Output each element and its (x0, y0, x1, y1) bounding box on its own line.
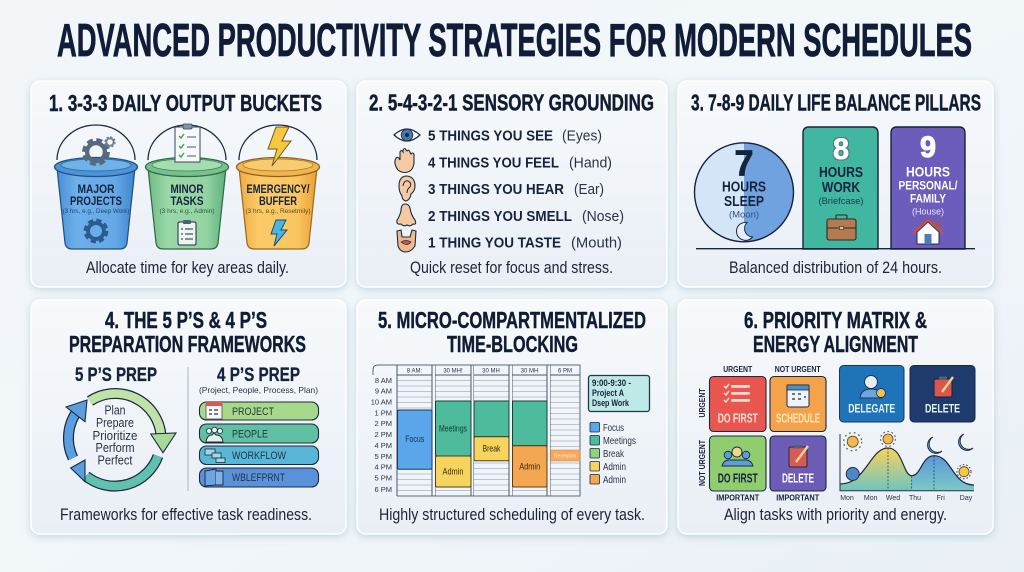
row: hear (399, 176, 604, 201)
chart: energy curve: Day (960, 495, 973, 502)
pillar: 7 hours sleep: SLEEP (724, 194, 764, 210)
panel: micro-compartmentalized time-blocking (357, 300, 667, 534)
legend (590, 422, 636, 486)
caption: panel 2: Quick reset for focus and stress. (410, 259, 613, 277)
pillar: 9 hours personal family: PERSONAL/ (898, 178, 958, 192)
row: taste (397, 230, 622, 252)
pillar: 9 hours personal family: HOURS (906, 164, 950, 180)
heading: panel 4 (69, 307, 306, 357)
cycle diagram: 5 P's (66, 393, 176, 486)
heading: panel 5: 5. MICRO-COMPARTMENTALIZED (378, 307, 646, 333)
block: focus (398, 410, 432, 469)
row: taste: 1 THING YOU TASTE (428, 236, 561, 252)
icon: bucket minor tasks: MINOR (170, 184, 204, 196)
pillar: 8 hours work: (Briefcase) (818, 196, 864, 207)
icon: bucket emergency buffer (236, 125, 320, 249)
block: admin orange (512, 446, 547, 487)
row: hear: 3 THINGS YOU HEAR (428, 182, 564, 198)
pillar: 8 hours work: HOURS (819, 165, 863, 181)
row: see (394, 128, 602, 144)
pillar: 7 hours sleep: 7 (734, 142, 754, 184)
row: feel: (Hand) (569, 156, 612, 172)
icon: bucket major projects: (3 hrs, e.g., Deep Work) (62, 208, 130, 215)
caption: panel 1: Allocate time for key areas daily. (86, 259, 289, 277)
row: see: 5 THINGS YOU SEE (428, 128, 553, 144)
pill: project: PROJECT (232, 406, 274, 418)
block: focus: Focus (405, 434, 424, 445)
card: delete navy (910, 366, 975, 422)
icon: bucket emergency buffer: BUFFER (259, 196, 298, 208)
calendar grid: 4 PM (374, 441, 392, 450)
legend: Meetings (603, 435, 636, 447)
icon: bucket major projects: MAJOR (78, 184, 115, 196)
card: delegate: DELEGATE (848, 402, 895, 416)
calendar grid: 5 PM (374, 452, 392, 461)
cell: do first green: DO FIRST (718, 472, 758, 486)
calendar grid: 4 PM (374, 462, 392, 472)
chart: energy curve: Thu (909, 495, 921, 502)
legend: Admin (603, 474, 626, 486)
callout: time block note: 9:00-9:30 - (592, 378, 631, 389)
heading: panel 4: PREPARATION FRAMEWORKS (69, 331, 306, 357)
heading: panel 6: 6. PRIORITY MATRIX & (744, 307, 927, 333)
icon: bucket minor tasks (146, 124, 228, 249)
matrix axis labels: NOT URGENT (775, 365, 821, 374)
icon: bucket minor tasks: TASKS (170, 196, 204, 208)
calendar grid: 8 AM: (407, 368, 423, 374)
row: see: (Eyes) (562, 128, 602, 144)
row: feel: 4 THINGS YOU FEEL (428, 156, 559, 172)
panel: priority matrix and energy alignment (678, 300, 993, 534)
heading: panel 5: TIME-BLOCKING (447, 331, 578, 357)
calendar grid: 6 PM (374, 485, 392, 494)
matrix axis labels: IMPORTANT (716, 494, 759, 502)
cell: do first green (710, 436, 766, 491)
legend: Admin (603, 461, 626, 473)
cycle diagram: 5 P's: Perform (96, 441, 134, 455)
caption: panel 5: Highly structured scheduling of every task. (379, 506, 645, 524)
pillar: 9 hours personal family: 9 (920, 131, 936, 164)
pill: blueprint (200, 468, 318, 487)
matrix axis labels: URGENT (723, 365, 752, 374)
pillar: 8 hours work (803, 127, 878, 249)
callout: time block note: Dsep Work (592, 398, 630, 409)
pillar: 9 hours personal family: FAMILY (910, 192, 946, 206)
pill: workflow (200, 446, 318, 464)
cell: do first red (710, 376, 766, 432)
subheading: 4 P's prep (199, 365, 318, 395)
heading: panel 1: 1. 3-3-3 DAILY OUTPUT BUCKETS (49, 90, 322, 116)
block: admin yellow: Admin (442, 466, 464, 478)
row: hear: (Ear) (574, 182, 604, 198)
panel: 5-4-3-2-1 sensory grounding (357, 81, 667, 287)
icon: bucket major projects: PROJECTS (70, 196, 122, 208)
block: admin yellow (436, 456, 471, 487)
icon: bucket emergency buffer: (3 hrs, e.g., Resetmily) (246, 208, 310, 215)
subheading: 4 P's prep: (Project, People, Process, Plan) (199, 385, 318, 395)
block: break: Break (482, 444, 501, 454)
pill: project (200, 402, 318, 420)
pillar: 8 hours work: 8 (833, 133, 849, 166)
heading: panel 6: ENERGY ALIGNMENT (753, 331, 918, 357)
cycle diagram: 5 P's: Prioritize (92, 429, 138, 443)
matrix axis labels: NOT URGENT (698, 440, 707, 486)
block: meetings (436, 401, 471, 456)
cell: schedule: SCHEDULE (776, 412, 820, 426)
ground line (696, 248, 975, 250)
cell: delete purple: DELETE (782, 472, 814, 486)
pillar: 7 hours sleep: (Moon) (729, 210, 759, 220)
chart: energy curve: Mon (864, 495, 878, 502)
caption: panel 6: Align tasks with priority and energy. (724, 506, 947, 524)
row: taste: (Mouth) (571, 236, 622, 252)
legend: Focus (603, 422, 624, 434)
pillar: 9 hours personal family: (House) (912, 206, 944, 218)
row: smell: (Nose) (582, 209, 624, 225)
calendar grid: 2 PM (374, 430, 392, 439)
card: delegate (840, 366, 904, 422)
pill: people: PEOPLE (232, 428, 268, 440)
caption: panel 4: Frameworks for effective task readiness. (60, 506, 312, 524)
pillar: 7 hours sleep (694, 142, 794, 242)
cycle diagram: 5 P's: Prepare (96, 416, 134, 430)
calendar grid: 8 AM (375, 376, 392, 385)
callout: time block note: Project A (592, 388, 624, 399)
row: smell (397, 204, 624, 226)
panel: 3-3-3 daily output buckets (31, 81, 346, 287)
chart: energy curve (840, 432, 974, 502)
calendar grid: 30 MH (521, 368, 538, 374)
matrix axis labels (698, 365, 821, 502)
icon: bucket emergency buffer: EMERGENCY/ (246, 184, 310, 196)
pill: people (200, 424, 318, 443)
matrix axis labels: URGENT (698, 388, 707, 418)
pill: workflow: WORKFLOW (232, 450, 287, 462)
cell: do first red: DO FIRST (718, 412, 758, 426)
matrix axis labels: IMPORTANT (776, 494, 819, 502)
calendar grid: 10 AM (371, 398, 392, 406)
callout: time block note (588, 376, 650, 412)
icon: bucket minor tasks: (3 hrs, e.g., Admin) (160, 208, 214, 215)
caption: panel 3: Balanced distribution of 24 hours. (729, 259, 942, 277)
legend: Break (603, 448, 625, 460)
calendar grid: 30 MH! (443, 368, 463, 374)
cell: delete purple (770, 436, 826, 491)
calendar grid: 2 PM (374, 419, 392, 428)
heading: panel 4: 4. THE 5 P’S & 4 P’S (105, 307, 267, 333)
pillar: 9 hours personal family (891, 127, 965, 249)
block: column 4 teal (512, 401, 547, 446)
panel: 7-8-9 daily life balance pillars (678, 81, 993, 287)
pillar: 7 hours sleep: HOURS (722, 180, 766, 196)
block: break (474, 437, 509, 461)
calendar grid: 6 PM (558, 368, 572, 374)
chart: energy curve: Mon (840, 495, 854, 502)
icon: bucket major projects (54, 125, 138, 249)
heading: panel 5 (378, 307, 646, 357)
block: small orange: Reception (554, 454, 577, 460)
row: smell: 2 THINGS YOU SMELL (428, 209, 572, 225)
chart: energy curve: Fri (937, 495, 945, 502)
cycle diagram: 5 P's: Plan (104, 404, 126, 418)
subheading: 4 P's prep: 4 P’S PREP (217, 365, 300, 386)
panel: 5 P's and 4 P's frameworks (31, 300, 346, 534)
calendar grid: 5 PM (374, 474, 392, 482)
block: meetings: Meetings (439, 424, 467, 434)
row: feel (395, 148, 612, 172)
block: small orange (550, 450, 580, 461)
heading: panel 2: 2. 5-4-3-2-1 SENSORY GROUNDING (369, 90, 654, 116)
card: delete navy: DELETE (925, 402, 960, 416)
pill: blueprint: WBLEFPRNT (232, 472, 285, 484)
calendar grid: 9 AM (375, 386, 392, 396)
calendar grid: 1 PM (374, 408, 392, 418)
heading: panel 6 (744, 307, 927, 357)
cell: schedule (770, 376, 826, 432)
subheading: 5 P's prep: 5 P’S PREP (75, 365, 157, 386)
divider (187, 367, 189, 491)
calendar grid: 30 MH (482, 368, 500, 374)
pillar: 8 hours work: WORK (822, 180, 860, 196)
chart: energy curve: Wed (886, 495, 900, 502)
calendar grid (371, 365, 580, 496)
block: column 3 teal (474, 401, 509, 437)
block: admin orange: Admin (519, 462, 540, 472)
cycle diagram: 5 P's: Perfect (98, 454, 133, 468)
